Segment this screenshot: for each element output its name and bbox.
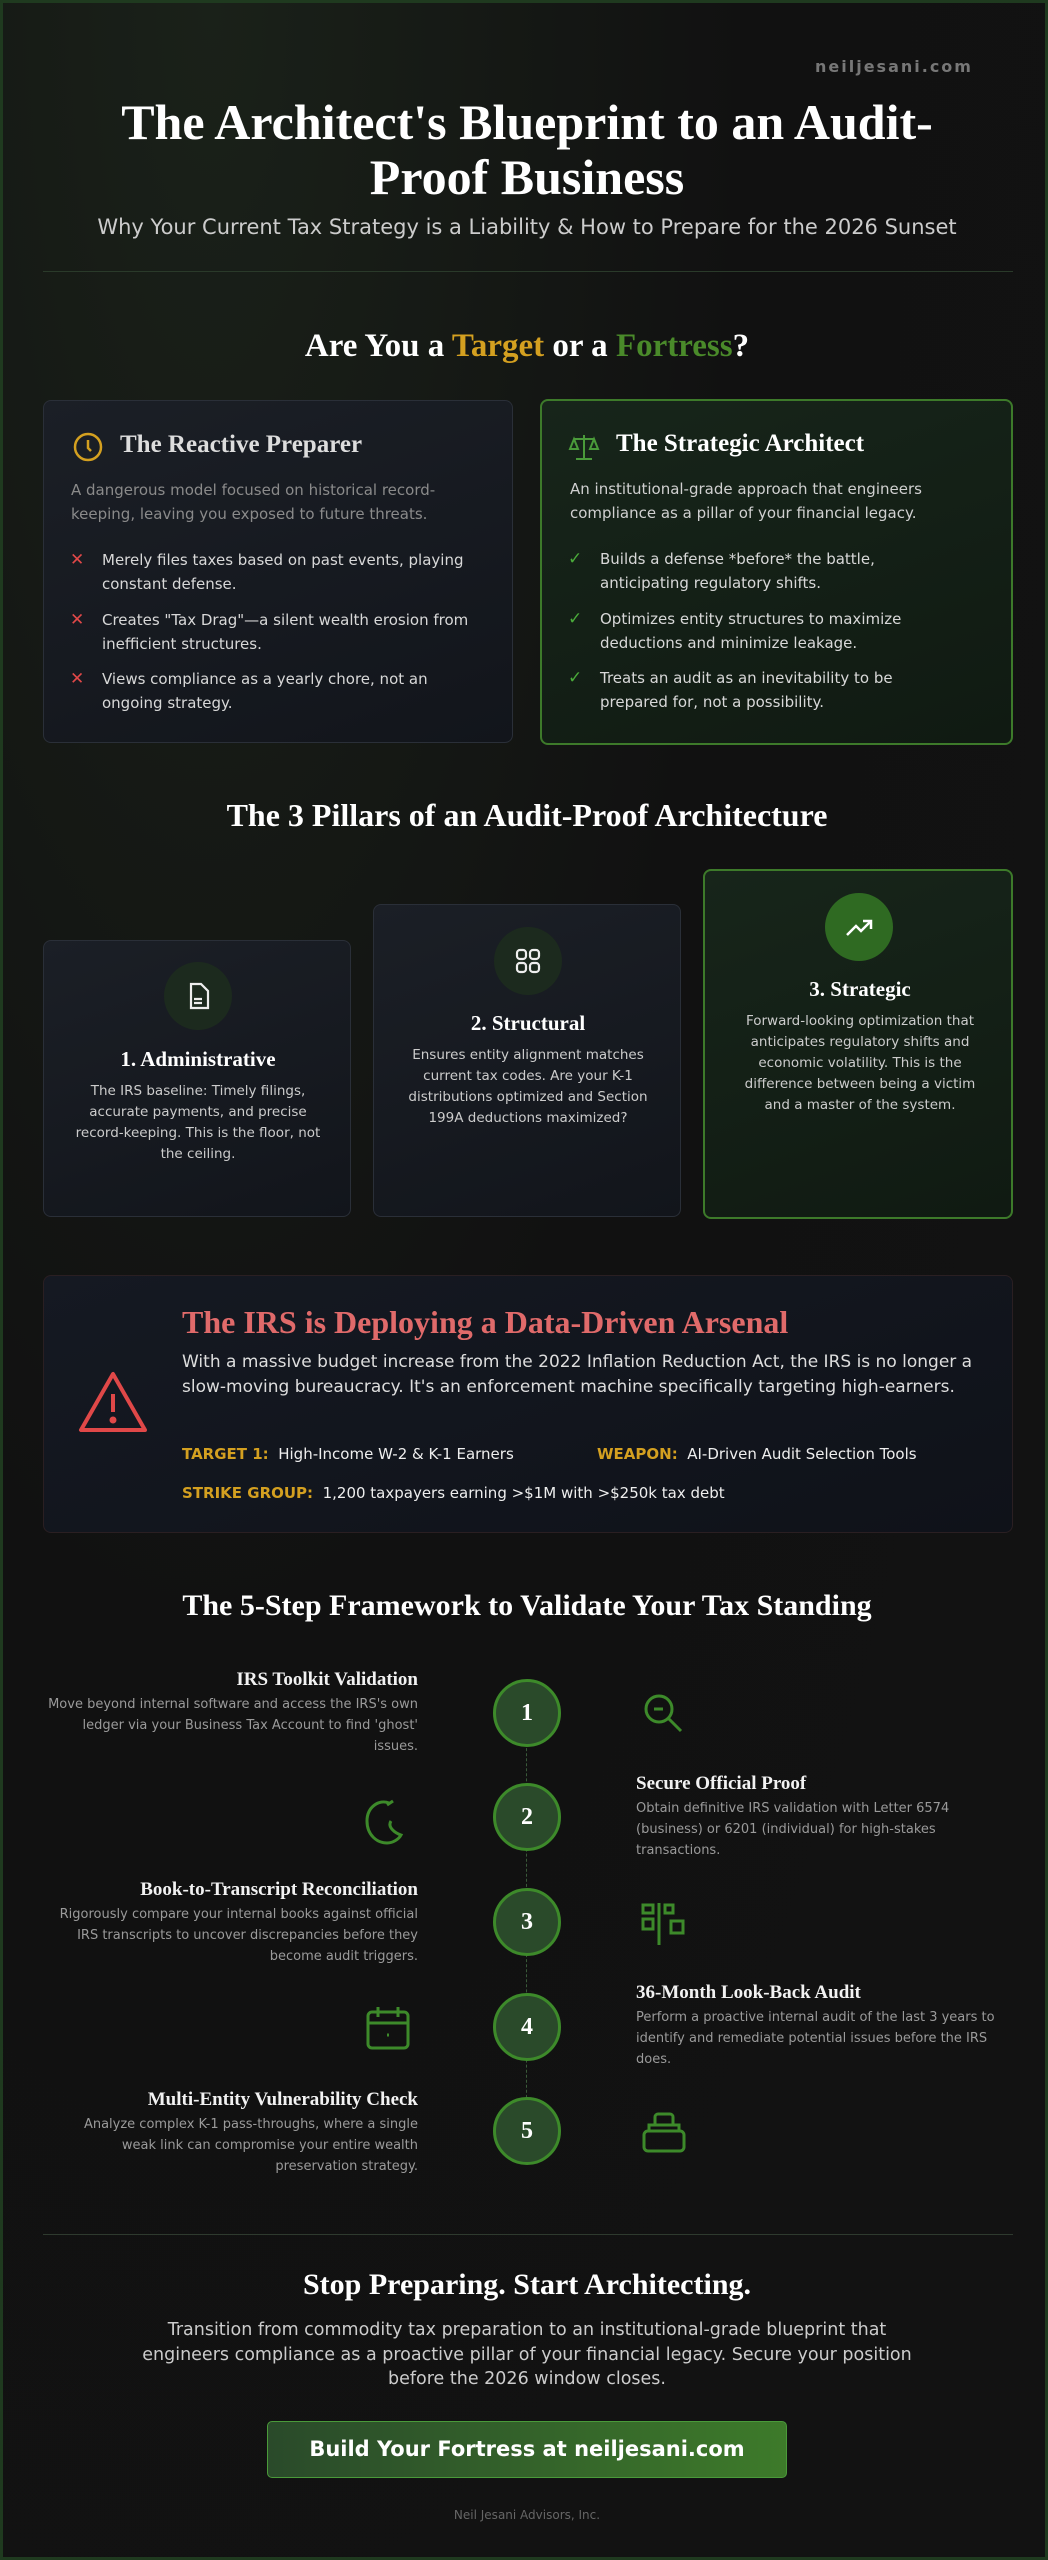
step 4: 36-Month Look-Back Audit <box>636 1982 861 2003</box>
step 5 <box>84 2089 418 2174</box>
pillar 2: Ensures entity alignment matches current tax codes. Are your K-1 distributions optimized and Section 199A deductions maximized? <box>408 1047 648 1126</box>
bullets: Treats an audit as an inevitability to be prepared for, not a possibility. <box>600 669 893 711</box>
bullets: ✕ <box>70 610 84 630</box>
step 1: Move beyond internal software and access the IRS's own ledger via your Business Tax Account to find 'ghost' issues. <box>48 1697 418 1754</box>
icon: calendar <box>366 2007 410 2050</box>
step circles <box>493 1679 561 2165</box>
pillar 2 <box>373 904 681 1217</box>
heading: target or fortress: Are You a Target or a Fortress? <box>305 328 749 364</box>
heading: The Reactive Preparer <box>120 431 362 458</box>
panel: IRS arsenal: STRIKE GROUP: 1,200 taxpayers earning >$1M with >$250k tax debt <box>182 1484 725 1502</box>
step 1 <box>48 1669 418 1754</box>
panel: IRS arsenal: The IRS is Deploying a Data-Driven Arsenal <box>182 1304 788 1340</box>
footer: Neil Jesani Advisors, Inc. <box>454 2508 600 2522</box>
CTA text: Transition from commodity tax preparation to an institutional-grade blueprint that engineers compliance as a proactive pillar of your financial legacy. Secure your position before the 2026 window closes. <box>142 2320 912 2389</box>
heading: 5 step: The 5-Step Framework to Validate Your Tax Standing <box>182 1589 872 1622</box>
bullets <box>70 550 468 712</box>
bullets: ✕ <box>70 550 84 570</box>
pillar 1: 1. Administrative <box>120 1047 276 1071</box>
heading: The Strategic Architect <box>616 430 864 457</box>
icon: scales <box>568 435 600 460</box>
bullets: ✓ <box>568 668 582 688</box>
pillar 1 <box>43 940 351 1217</box>
icon: search <box>644 1694 682 1732</box>
icon: layout <box>642 1903 684 1945</box>
timeline line <box>526 1713 527 2133</box>
title: The Architect's Blueprint to an Audit- <box>121 94 933 150</box>
pillar 3 <box>703 869 1013 1219</box>
CTA button <box>267 2421 787 2478</box>
step circles: 2 <box>521 1804 533 1830</box>
panel: IRS arsenal: TARGET 1: High-Income W-2 & K-1 Earners <box>182 1445 514 1463</box>
bullets: Merely files taxes based on past events, playing constant defense. <box>102 551 463 593</box>
panel: IRS arsenal: WEAPON: AI-Driven Audit Selection Tools <box>597 1445 917 1463</box>
step 4 <box>636 1982 995 2067</box>
icon: document <box>164 962 232 1030</box>
panel: IRS arsenal: With a massive budget increase from the 2022 Inflation Reduction Act, the IRS is no longer a slow-moving bureaucracy. It's an enforcement machine specifically targeting high-earners. <box>182 1352 972 1396</box>
pillar 3: Forward-looking optimization that anticipates regulatory shifts and economic volatility. This is the difference between being a victim and a master of the system. <box>745 1013 975 1113</box>
icon: clock <box>74 432 102 462</box>
step circles: 5 <box>521 2118 533 2144</box>
title <box>121 94 933 205</box>
step 2: Obtain definitive IRS validation with Letter 6574 (business) or 6201 (individual) for high-stakes transactions. <box>636 1801 949 1858</box>
step 4: Perform a proactive internal audit of the last 3 years to identify and remediate potential issues before the IRS does. <box>636 2010 995 2067</box>
bullets: ✓ <box>568 609 582 629</box>
step 1: IRS Toolkit Validation <box>236 1669 418 1690</box>
step circles: 3 <box>521 1909 533 1935</box>
site url: neiljesani.com <box>815 57 973 76</box>
description: A dangerous model focused on historical record-keeping, leaving you exposed to future threats. <box>71 481 435 523</box>
subtitle: Why Your Current Tax Strategy is a Liability & How to Prepare for the 2026 Sunset <box>97 215 957 239</box>
heading: 3 pillars: The 3 Pillars of an Audit-Proof Architecture <box>227 797 827 833</box>
CTA heading: Stop Preparing. Start Architecting. <box>303 2268 751 2301</box>
CTA button: Build Your Fortress at neiljesani.com <box>309 2437 745 2461</box>
icon: grid <box>494 927 562 995</box>
title: Proof Business <box>370 149 684 205</box>
step 2: Secure Official Proof <box>636 1773 806 1794</box>
step circles: 1 <box>521 1700 533 1726</box>
step 3: Rigorously compare your internal books against official IRS transcripts to uncover discrepancies before they become audit triggers. <box>60 1907 418 1964</box>
icon: apple <box>366 1800 403 1844</box>
bullets: Creates "Tax Drag"—a silent wealth erosion from inefficient structures. <box>102 611 468 653</box>
panel: strategic architect <box>540 399 1013 745</box>
bullets: ✓ <box>568 549 582 569</box>
bullets: Views compliance as a yearly chore, not an ongoing strategy. <box>102 670 428 712</box>
icon: trend <box>825 893 893 961</box>
icon: warning <box>78 1372 147 1432</box>
bullets: Optimizes entity structures to maximize deductions and minimize leakage. <box>600 610 901 652</box>
description: An institutional-grade approach that engineers compliance as a pillar of your financial legacy. <box>570 480 922 522</box>
pillar 2: 2. Structural <box>471 1011 585 1035</box>
bullets <box>568 549 901 711</box>
step 5: Analyze complex K-1 pass-throughs, where a single weak link can compromise your entire wealth preservation strategy. <box>84 2117 418 2174</box>
icon: stack <box>642 2112 686 2152</box>
pillar 3: 3. Strategic <box>809 977 911 1001</box>
bullets: Builds a defense *before* the battle, anticipating regulatory shifts. <box>600 550 875 592</box>
step 3 <box>60 1879 418 1964</box>
pillar 1: The IRS baseline: Timely filings, accurate payments, and precise record-keeping. This is the floor, not the ceiling. <box>76 1083 320 1162</box>
panel: IRS arsenal <box>43 1275 1013 1533</box>
step 3: Book-to-Transcript Reconciliation <box>140 1879 418 1900</box>
bullets: ✕ <box>70 669 84 689</box>
step circles: 4 <box>521 2014 533 2040</box>
step 2 <box>636 1773 949 1858</box>
panel: reactive preparer <box>43 400 513 743</box>
step 5: Multi-Entity Vulnerability Check <box>148 2089 418 2110</box>
